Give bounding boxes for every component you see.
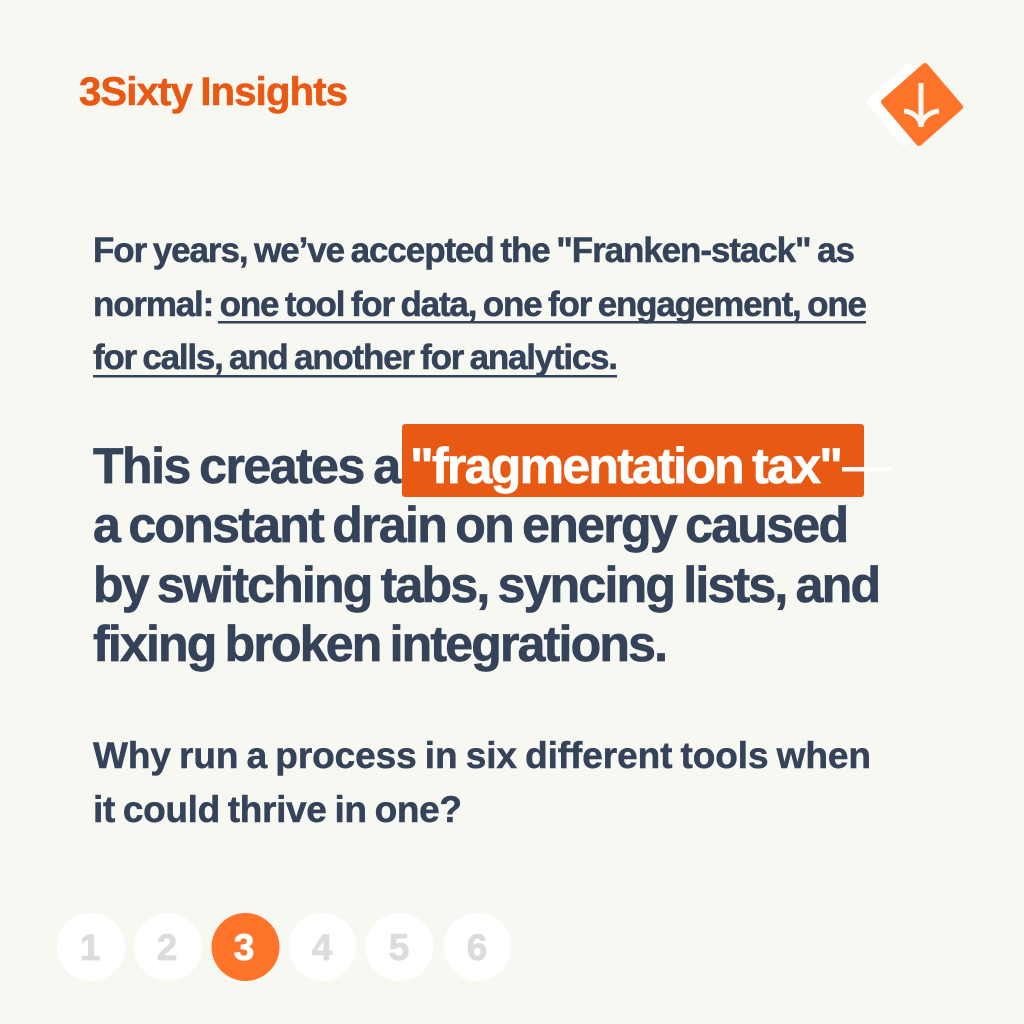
title: brand name: 3Sixty Insights — [79, 70, 348, 114]
text block: closing question: Why run a process in six different tools when — [93, 735, 871, 776]
text block: intro paragraph: For years, we’ve accepted the "Franken-stack" as — [93, 231, 855, 270]
text block: fragmentation tax statement: by switching tabs, syncing lists, and — [93, 557, 881, 613]
text block: intro paragraph: for calls, and another for analytics. — [93, 338, 618, 377]
pagination: numbered steps: 6 — [467, 927, 487, 968]
text block: fragmentation tax statement: a constant drain on energy caused — [93, 497, 849, 553]
highlight: fragmentation tax: "fragmentation tax" — [410, 438, 843, 494]
text block: fragmentation tax statement: This creates a — [93, 438, 402, 494]
pagination: numbered steps: 5 — [389, 927, 409, 968]
pagination: numbered steps: 4 — [312, 927, 333, 968]
text block: fragmentation tax statement — [93, 424, 892, 672]
pagination: numbered steps: 1 — [80, 927, 100, 968]
pagination: numbered steps — [57, 913, 512, 981]
text block: closing question: it could thrive in one? — [93, 789, 462, 830]
text block: intro paragraph: normal: one tool for data, one for engagement, one — [93, 285, 867, 324]
pagination: numbered steps: 3 — [234, 927, 254, 968]
text block: closing question — [93, 735, 871, 830]
highlight: fragmentation tax — [402, 424, 892, 497]
text block: intro paragraph — [93, 231, 867, 378]
icon: logo diamond with down arrow — [869, 66, 960, 143]
pagination: numbered steps: 2 — [157, 927, 177, 968]
text block: fragmentation tax statement: fixing broken integrations. — [93, 616, 668, 672]
